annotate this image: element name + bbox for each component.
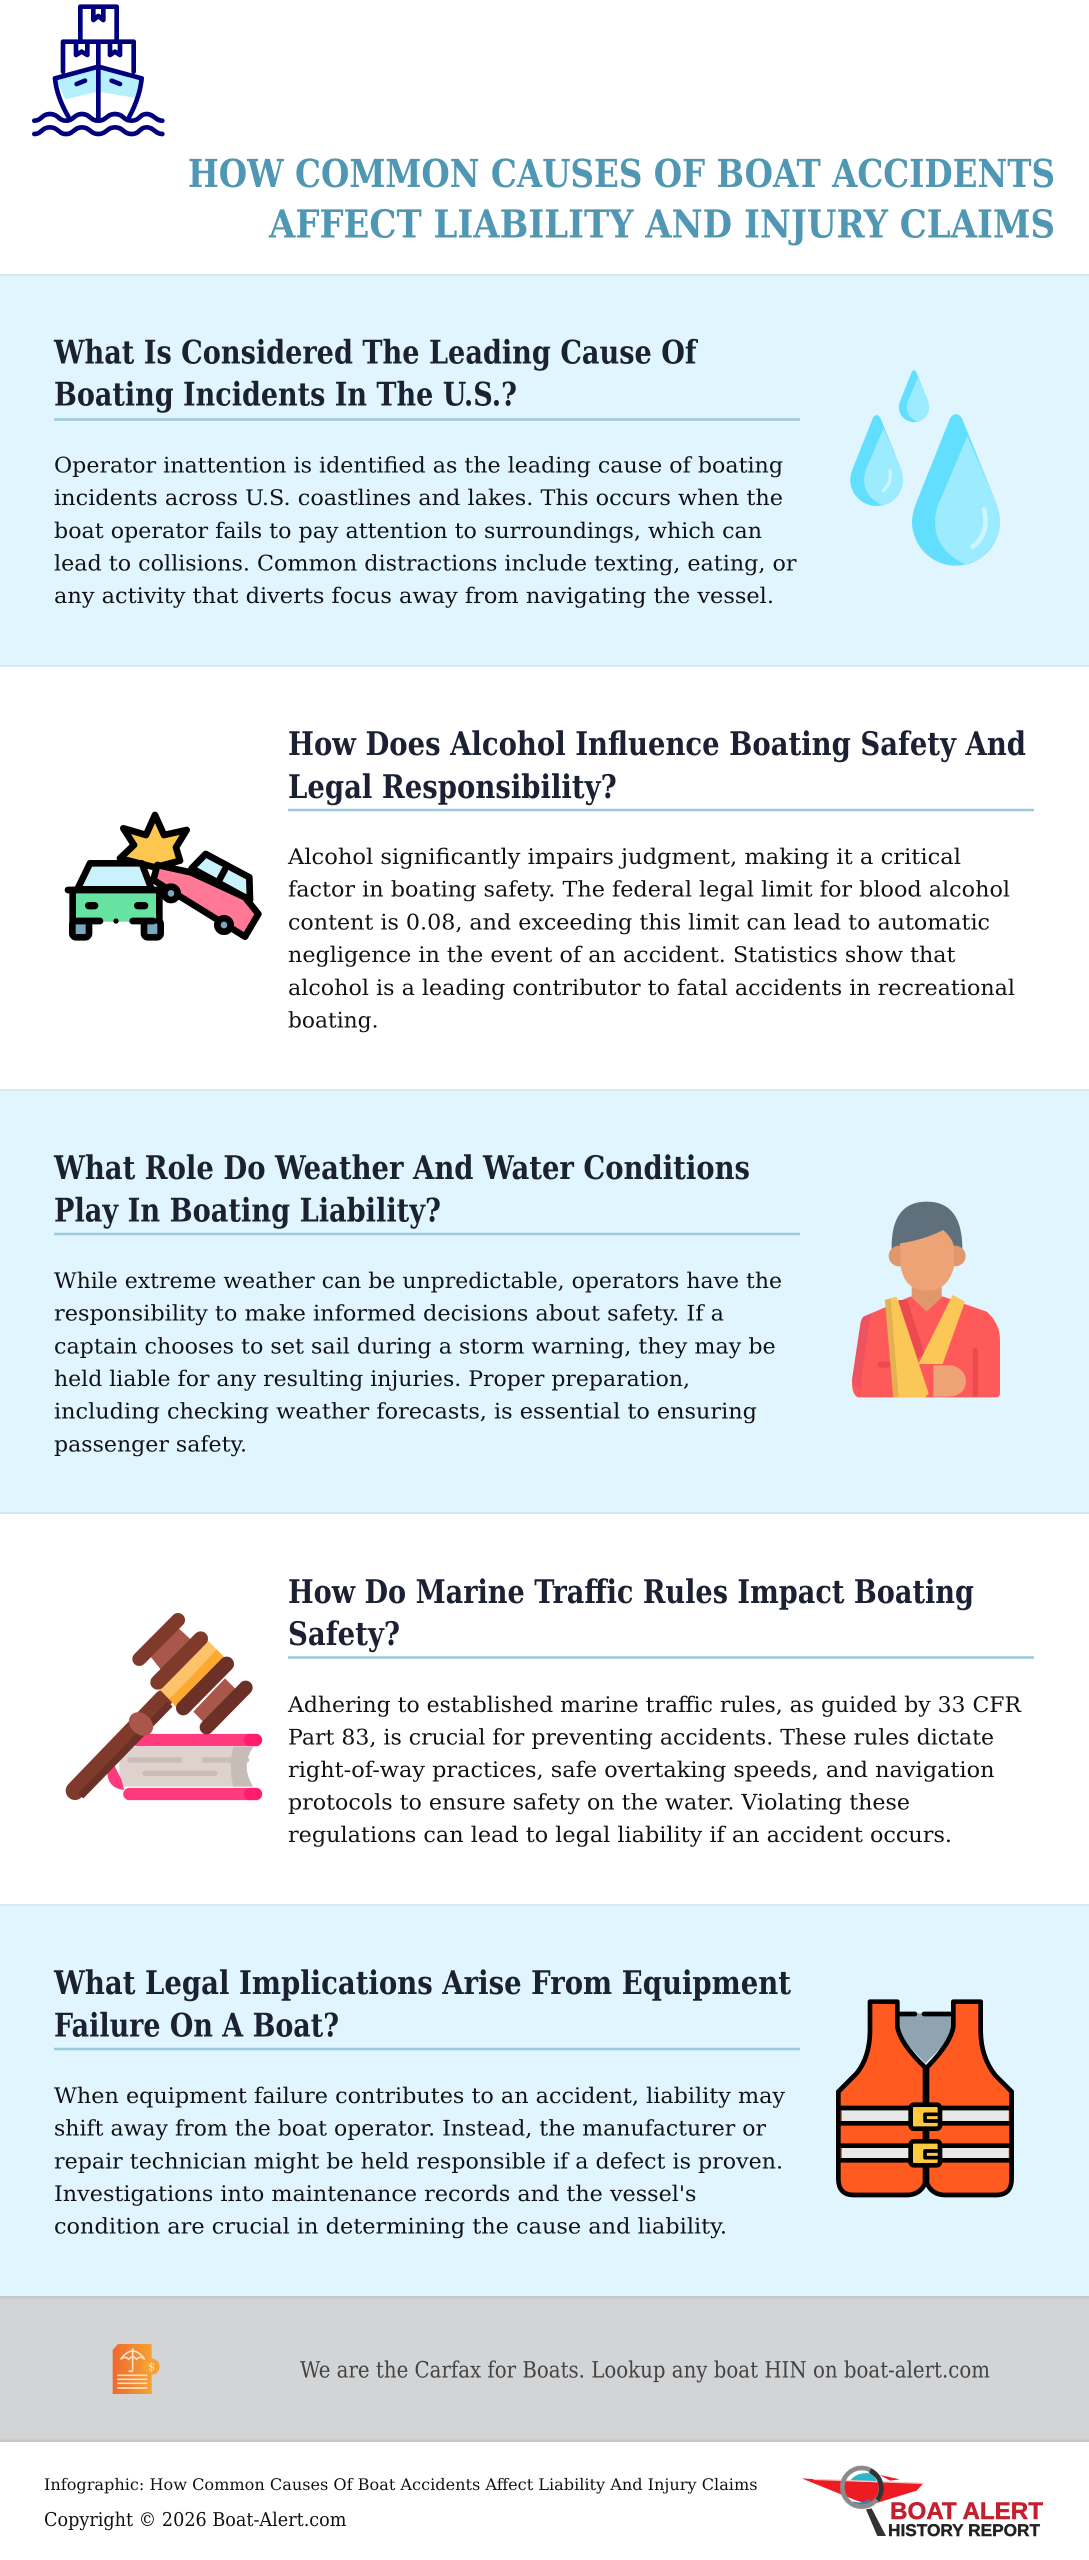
banner: Carfax for boats call to action xyxy=(0,2296,1089,2442)
body text: protocols to ensure safety on the water. Violating these xyxy=(288,1790,910,1816)
body text: Alcohol significantly impairs judgment, making it a critical xyxy=(287,845,961,870)
panel: weather and water conditions xyxy=(0,1089,1089,1514)
body text: passenger safety. xyxy=(54,1432,247,1457)
heading: Play In Boating Liability? xyxy=(54,1190,441,1230)
body text: lead to collisions. Common distractions include texting, eating, or xyxy=(54,551,797,576)
body text: Adhering to established marine traffic rules, as guided by 33 CFR xyxy=(287,1693,1022,1718)
icon: cargo ship xyxy=(34,7,162,134)
heading: Boating Incidents In The U.S.? xyxy=(54,374,517,414)
panel: leading cause of boating incidents xyxy=(0,274,1089,667)
header with ship icon and title xyxy=(34,7,1055,248)
logo: Boat Alert History Report: HISTORY REPORT xyxy=(888,2521,1041,2540)
body text: shift away from the boat operator. Instead, the manufacturer or xyxy=(54,2117,767,2142)
icon: injured man with arm sling xyxy=(852,1202,1000,1397)
body text xyxy=(54,454,797,609)
body text xyxy=(287,1693,1022,1848)
body text: When equipment failure contributes to an accident, liability may xyxy=(54,2084,786,2109)
icon: gavel on a book xyxy=(75,1620,256,1796)
footer xyxy=(44,2468,1043,2540)
logo: Boat Alert History Report: BOAT ALERT xyxy=(890,2498,1043,2525)
copyright line: Copyright © 2026 Boat-Alert.com xyxy=(44,2509,346,2531)
icon: insurance document: $ xyxy=(148,2360,155,2374)
heading: Safety? xyxy=(288,1614,400,1653)
body text: captain chooses to set sail during a storm warning, they may be xyxy=(54,1334,776,1359)
source line: Infographic: How Common Causes Of Boat Accidents Affect Liability And Injury Claims xyxy=(44,2475,758,2494)
body text: boat operator fails to pay attention to surroundings, which can xyxy=(54,519,762,544)
body text xyxy=(54,2084,786,2240)
panel: marine traffic rules xyxy=(75,1572,1034,1848)
heading: Legal Responsibility? xyxy=(288,767,617,806)
heading: What Role Do Weather And Water Conditions xyxy=(53,1148,750,1187)
body text: including checking weather forecasts, is essential to ensuring xyxy=(54,1400,757,1425)
body text: Part 83, is crucial for preventing accidents. These rules dictate xyxy=(288,1726,994,1750)
heading: Failure On A Boat? xyxy=(54,2006,339,2044)
body text: right-of-way practices, safe overtaking speeds, and navigation xyxy=(288,1758,995,1783)
body text: condition are crucial in determining the cause and liability. xyxy=(54,2214,727,2240)
body text: factor in boating safety. The federal legal limit for blood alcohol xyxy=(288,878,1010,903)
heading: What Legal Implications Arise From Equipment xyxy=(53,1963,791,2002)
body text: alcohol is a leading contributor to fatal accidents in recreational xyxy=(288,976,1015,1001)
heading xyxy=(288,724,1026,806)
heading xyxy=(53,1963,791,2044)
body text: responsibility to make informed decisions about safety. If a xyxy=(54,1302,724,1327)
body text: content is 0.08, and exceeding this limit can lead to automatic xyxy=(288,910,990,935)
body text: held liable for any resulting injuries. Proper preparation, xyxy=(54,1367,690,1392)
heading xyxy=(53,1148,750,1230)
icon: water drops xyxy=(850,370,1000,566)
body text: Investigations into maintenance records and the vessel's xyxy=(54,2182,696,2207)
body text: any activity that diverts focus away from navigating the vessel. xyxy=(54,584,774,609)
icon: life jacket xyxy=(838,2002,1012,2195)
title xyxy=(188,152,1055,248)
heading: What Is Considered The Leading Cause Of xyxy=(53,332,698,372)
body text: Operator inattention is identified as the leading cause of boating xyxy=(54,454,783,479)
body text: incidents across U.S. coastlines and lakes. This occurs when the xyxy=(54,486,783,511)
icon: insurance document xyxy=(113,2344,160,2394)
panel: alcohol and boating safety xyxy=(68,724,1034,1034)
panel: equipment failure xyxy=(0,1904,1089,2297)
body text xyxy=(287,845,1015,1034)
body text: boating. xyxy=(288,1008,378,1034)
heading: How Do Marine Traffic Rules Impact Boating xyxy=(288,1572,974,1611)
body text: While extreme weather can be unpredictable, operators have the xyxy=(54,1269,782,1294)
body text xyxy=(54,1269,782,1457)
icon: car collision xyxy=(68,815,258,937)
heading xyxy=(288,1572,974,1653)
body text: negligence in the event of an accident. Statistics show that xyxy=(288,943,956,968)
body text: repair technician might be held responsible if a defect is proven. xyxy=(54,2149,783,2174)
call-to-action text: We are the Carfax for Boats. Lookup any boat HIN on boat-alert.com xyxy=(300,2358,990,2384)
logo: Boat Alert History Report xyxy=(802,2468,1043,2540)
heading xyxy=(53,332,698,414)
body text: regulations can lead to legal liability if an accident occurs. xyxy=(288,1823,952,1848)
